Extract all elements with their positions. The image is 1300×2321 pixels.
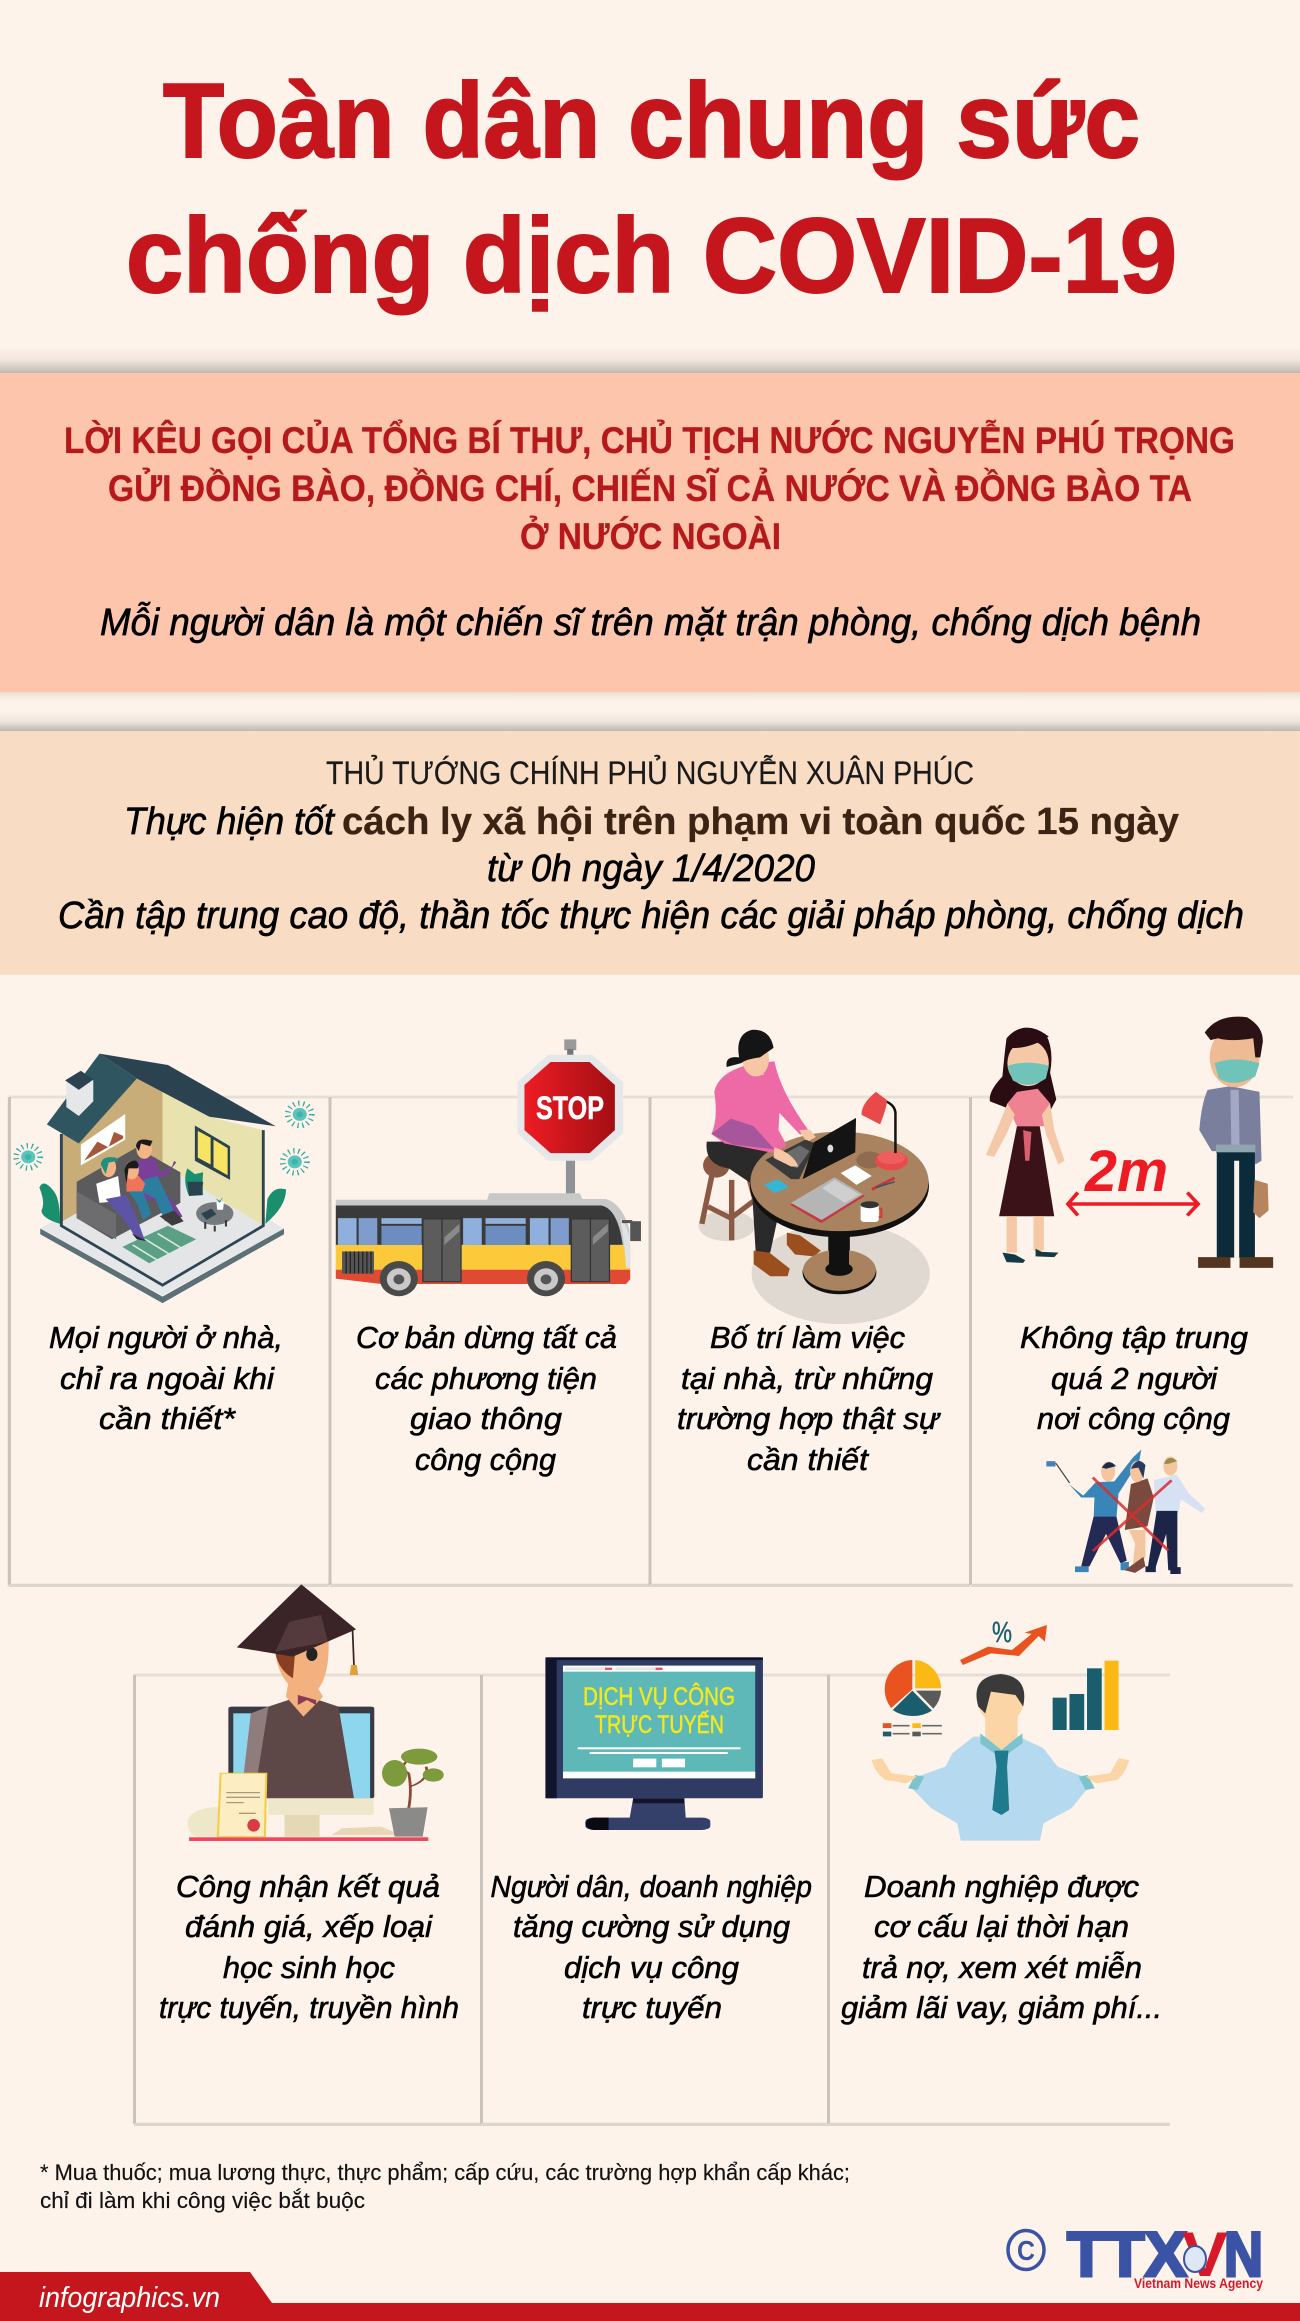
panel: General Secretary's appeal — [0, 373, 1300, 692]
text: stay at home — [49, 1320, 283, 1436]
screen label — [583, 1682, 735, 1739]
logo: TTXVN: N — [1224, 2220, 1263, 2290]
text: online public services: trực tuyến — [582, 1990, 722, 2025]
text: online public services — [490, 1869, 812, 2025]
text: gatherings: Không tập trung — [1020, 1320, 1248, 1355]
text: work from home: Bố trí làm việc — [710, 1320, 905, 1355]
text: stay at home: Mọi người ở nhà, — [49, 1320, 283, 1355]
text: public transport: các phương tiện — [375, 1361, 597, 1396]
icon: stop sign and bus — [336, 1039, 641, 1296]
icon: businessman with charts — [872, 1625, 1129, 1841]
icon: computer monitor — [545, 1657, 763, 1830]
panel: card stay at home — [8, 1054, 329, 1587]
panel: card social distancing — [969, 1017, 1293, 1587]
panel: card online public services — [480, 1657, 828, 2126]
text: stay at home: chỉ ra ngoài khi — [60, 1361, 275, 1396]
text: online learning: Công nhận kết quả — [176, 1869, 440, 1904]
panel: card public transport — [328, 1039, 650, 1587]
slogan: Mỗi người dân là một chiến sĩ trên mặt trận phòng, chống dịch bệnh — [100, 600, 1201, 644]
logo: TTXVN: V — [1182, 2220, 1228, 2290]
icon: house with family — [16, 1054, 312, 1303]
heading: appeal — [64, 418, 1235, 557]
directive text: từ 0h ngày 1/4/2020 — [487, 848, 815, 890]
heading: appeal: Ở NƯỚC NGOÀI — [520, 515, 781, 557]
heading: appeal: GỬI ĐỒNG BÀO, ĐỒNG CHÍ, CHIẾN SĨ CẢ NƯỚC VÀ ĐỒNG BÀO TA — [108, 467, 1192, 509]
footnote: * Mua thuốc; mua lương thực, thực phẩm; cấp cứu, các trường hợp khẩn cấp khác; — [40, 2160, 850, 2185]
text: online learning: học sinh học — [223, 1950, 395, 1985]
text: business support — [841, 1869, 1162, 2025]
text: stay at home: cần thiết* — [99, 1401, 236, 1436]
text: business support: Doanh nghiệp được — [864, 1869, 1140, 1904]
footer band — [0, 2272, 1300, 2321]
text: online public services: dịch vụ công — [564, 1950, 739, 1985]
text: work from home — [677, 1320, 941, 1477]
panel: card online learning — [133, 1584, 481, 2126]
text: business support: trả nợ, xem xét miễn — [862, 1950, 1142, 1985]
text: gatherings — [1020, 1320, 1248, 1436]
directive text: cách ly xã hội trên phạm vi toàn quốc 15 ngày — [342, 801, 1179, 843]
text: online public services: Người dân, doanh nghiệp — [490, 1869, 812, 1904]
text: work from home: cần thiết — [747, 1442, 869, 1477]
text: gatherings: nơi công cộng — [1037, 1401, 1230, 1436]
distance label: 2m — [1084, 1139, 1168, 1204]
panel: Prime Minister's directive — [0, 731, 1300, 975]
logo: TTXVN: Vietnam News Agency — [1134, 2275, 1263, 2291]
icon: woman at laptop — [699, 1030, 930, 1324]
footnote: chỉ đi làm khi công việc bắt buộc — [40, 2188, 365, 2213]
copyright mark: C — [1017, 2235, 1035, 2266]
panel: card work from home — [648, 1030, 970, 1587]
icon: woman and man with masks — [986, 1017, 1273, 1268]
logo: TTXVN: TTX — [1067, 2220, 1187, 2290]
title — [126, 62, 1177, 315]
panel: card business support — [827, 1617, 1170, 2126]
percent sign: % — [992, 1617, 1012, 1649]
text: public transport: giao thông — [410, 1401, 562, 1436]
text: public transport: Cơ bản dừng tất cả — [356, 1320, 617, 1355]
website label: infographics.vn — [39, 2282, 220, 2314]
text: public transport — [356, 1320, 617, 1477]
text: business support: giảm lãi vay, giảm phí... — [841, 1990, 1162, 2025]
text: online learning: đánh giá, xếp loại — [185, 1909, 433, 1944]
title: chống dịch COVID-19 — [126, 197, 1177, 315]
directive text: Cần tập trung cao độ, thần tốc thực hiện các giải pháp phòng, chống dịch — [58, 895, 1244, 937]
sign text: STOP — [536, 1090, 604, 1126]
directive text — [58, 801, 1244, 937]
footnote — [40, 2160, 850, 2213]
icon: graduate in computer — [188, 1584, 444, 1841]
text: gatherings: quá 2 người — [1051, 1361, 1218, 1396]
text: online learning: trực tuyến, truyền hình — [159, 1990, 459, 2025]
screen label: DỊCH VỤ CÔNG — [583, 1682, 735, 1711]
screen label: TRỰC TUYẾN — [595, 1710, 724, 1739]
icon: crossed-out group selfie — [1046, 1450, 1206, 1574]
title: Toàn dân chung sức — [163, 62, 1140, 180]
copyright mark — [1008, 2230, 1044, 2270]
logo: TTXVN — [1008, 2220, 1263, 2291]
directive text: Thực hiện tốt — [124, 801, 335, 843]
text: public transport: công cộng — [415, 1442, 556, 1477]
speaker line: THỦ TƯỚNG CHÍNH PHỦ NGUYỄN XUÂN PHÚC — [326, 755, 974, 791]
text: work from home: tại nhà, trừ những — [681, 1361, 933, 1396]
text: work from home: trường hợp thật sự — [677, 1401, 941, 1436]
text: online public services: tăng cường sử dụng — [513, 1909, 790, 1944]
text: business support: cơ cấu lại thời hạn — [874, 1909, 1129, 1944]
text: online learning — [159, 1869, 459, 2025]
distance arrow — [1068, 1192, 1198, 1215]
